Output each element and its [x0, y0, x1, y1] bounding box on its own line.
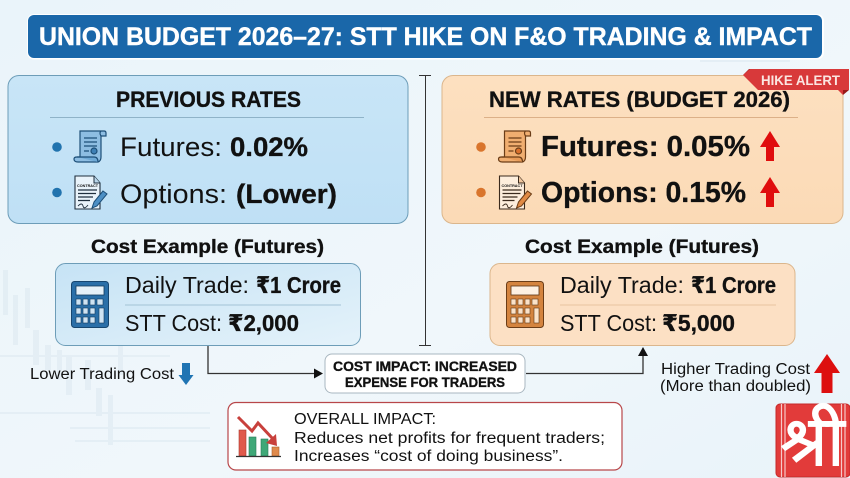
icon: contract — [500, 176, 532, 209]
heading: previous rates: PREVIOUS RATES — [116, 87, 301, 112]
note: higher trading cost — [660, 354, 840, 395]
card: previous cost example — [56, 264, 360, 346]
text: daily trade: Daily Trade: — [125, 272, 249, 298]
futures row — [476, 131, 780, 163]
panel: overall impact — [228, 402, 622, 470]
icon: calculator — [506, 282, 544, 328]
arrow: impact to new cost — [526, 347, 648, 374]
note: higher trading cost: (More than doubled) — [660, 378, 811, 395]
heading: cost example right: Cost Example (Futures) — [525, 237, 759, 258]
badge: hike alert — [743, 69, 849, 95]
icon: down arrow — [178, 363, 194, 385]
panel: new rates — [442, 76, 843, 224]
text: stt cost: STT Cost: — [125, 310, 222, 336]
icon: contract: CONTRACT — [502, 184, 523, 188]
icon: scroll document — [74, 131, 106, 162]
note: lower trading cost — [30, 363, 194, 385]
label and value: futures: Futures: 0.05% — [541, 131, 750, 163]
title banner — [27, 14, 824, 60]
text: daily trade: Daily Trade: — [560, 272, 684, 298]
center divider line — [419, 76, 431, 346]
icon: contract — [75, 176, 107, 209]
options row — [476, 176, 780, 209]
icon: scroll document — [498, 131, 530, 162]
value: options rate: (Lower) — [236, 179, 337, 209]
badge: hike alert: HIKE ALERT — [761, 72, 840, 88]
note: higher trading cost: Higher Trading Cost — [661, 361, 811, 378]
text: stt cost: STT Cost: — [560, 310, 657, 336]
icon: up arrow — [814, 354, 840, 393]
label and value: options: Options: 0.15% — [541, 177, 746, 209]
icon: up arrow — [760, 177, 780, 207]
arrow: previous cost to impact — [208, 346, 323, 378]
panel: overall impact: Reduces net profits for frequent traders; — [294, 430, 605, 447]
value: one crore: ₹1 Crore — [691, 272, 776, 298]
value: stt cost 5,000: ₹5,000 — [662, 310, 735, 336]
callout: cost impact — [325, 354, 525, 393]
icon: calculator — [72, 282, 108, 328]
callout: cost impact: COST IMPACT: INCREASED — [333, 358, 517, 374]
icon: up arrow — [760, 131, 780, 161]
text: overall impact: OVERALL IMPACT: — [294, 411, 436, 428]
card: new cost example — [490, 264, 795, 346]
value: one crore: ₹1 Crore — [256, 272, 341, 298]
callout: cost impact: EXPENSE FOR TRADERS — [345, 374, 505, 390]
label: futures: Futures: — [120, 132, 222, 162]
title banner: UNION BUDGET 2026–27: STT HIKE ON F&O TRADING & IMPACT — [39, 23, 812, 51]
heading: new rates: NEW RATES (BUDGET 2026) — [489, 87, 790, 112]
value: stt cost 2,000: ₹2,000 — [228, 310, 299, 336]
note: lower trading cost: Lower Trading Cost — [30, 366, 175, 383]
icon: falling bar chart — [236, 417, 281, 456]
value: futures rate: 0.02% — [230, 132, 308, 162]
options row — [52, 176, 337, 209]
panel: overall impact: Increases “cost of doing business”. — [294, 448, 563, 465]
futures row — [52, 131, 308, 162]
panel: previous rates — [8, 76, 408, 224]
icon: contract: CONTRACT — [77, 184, 99, 188]
label: options: Options: — [120, 179, 227, 209]
heading: cost example left: Cost Example (Futures) — [91, 237, 324, 258]
